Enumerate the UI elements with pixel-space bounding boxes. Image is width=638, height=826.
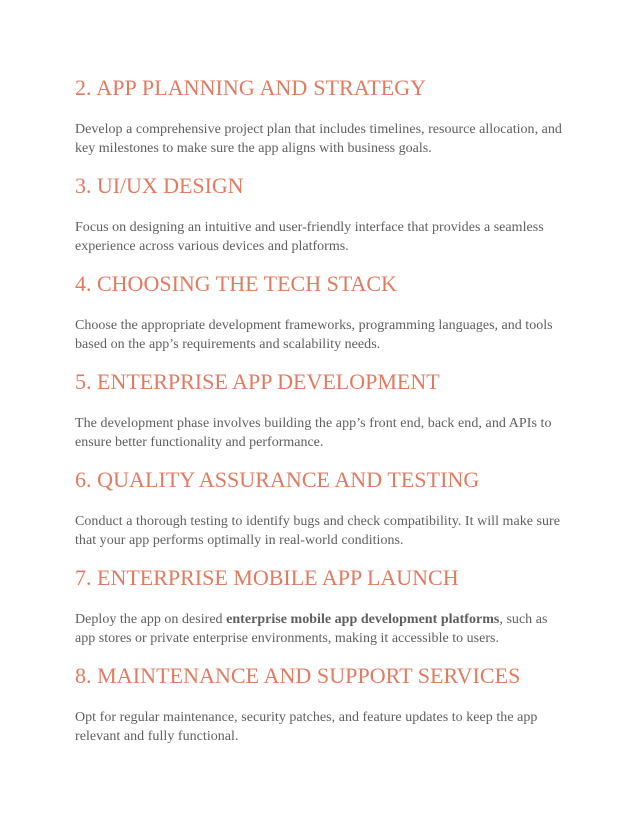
text: step 8 description: Opt for regular maintenance, security patches, and feature updates to keep the app	[75, 710, 537, 725]
text: step 7 description: app stores or private enterprise environments, making it accessible to users.	[75, 631, 499, 646]
text: step 4 description	[75, 318, 553, 352]
text: step 8 description	[75, 710, 537, 744]
text: step 7 description	[75, 612, 547, 646]
heading: step 8: 8. MAINTENANCE AND SUPPORT SERVICES	[75, 663, 520, 688]
heading: step 3: 3. UI/UX DESIGN	[75, 173, 244, 198]
text: step 4 description: Choose the appropriate development frameworks, programming languages, and tools	[75, 318, 553, 333]
text: step 5 description: ensure better functionality and performance.	[75, 435, 323, 450]
text: step 5 description: The development phase involves building the app’s front end, back end, and APIs to	[75, 416, 552, 431]
text: step 6 description: Conduct a thorough testing to identify bugs and check compatibility. It will make sure	[75, 514, 560, 529]
heading: step 6: 6. QUALITY ASSURANCE AND TESTING	[75, 467, 479, 492]
text: step 3 description: experience across various devices and platforms.	[75, 239, 349, 254]
text: step 2 description: key milestones to make sure the app aligns with business goals.	[75, 141, 432, 156]
heading: step 4: 4. CHOOSING THE TECH STACK	[75, 271, 397, 296]
text: step 4 description: based on the app’s requirements and scalability needs.	[75, 337, 380, 352]
text: step 6 description	[75, 514, 560, 548]
text: step 7 description: Deploy the app on desired enterprise mobile app development platforms, such as	[75, 612, 547, 627]
text: step 8 description: relevant and fully functional.	[75, 729, 239, 744]
heading: step 7: 7. ENTERPRISE MOBILE APP LAUNCH	[75, 565, 459, 590]
heading: step 2: 2. APP PLANNING AND STRATEGY	[75, 75, 426, 100]
text: step 2 description: Develop a comprehensive project plan that includes timelines, resource allocation, and	[75, 122, 562, 137]
text: step 6 description: that your app performs optimally in real-world conditions.	[75, 533, 404, 548]
text: step 2 description	[75, 122, 562, 156]
text: step 3 description	[75, 220, 544, 254]
text: step 3 description: Focus on designing an intuitive and user-friendly interface that provides a seamless	[75, 220, 544, 235]
text: step 5 description	[75, 416, 552, 450]
heading: step 5: 5. ENTERPRISE APP DEVELOPMENT	[75, 369, 440, 394]
